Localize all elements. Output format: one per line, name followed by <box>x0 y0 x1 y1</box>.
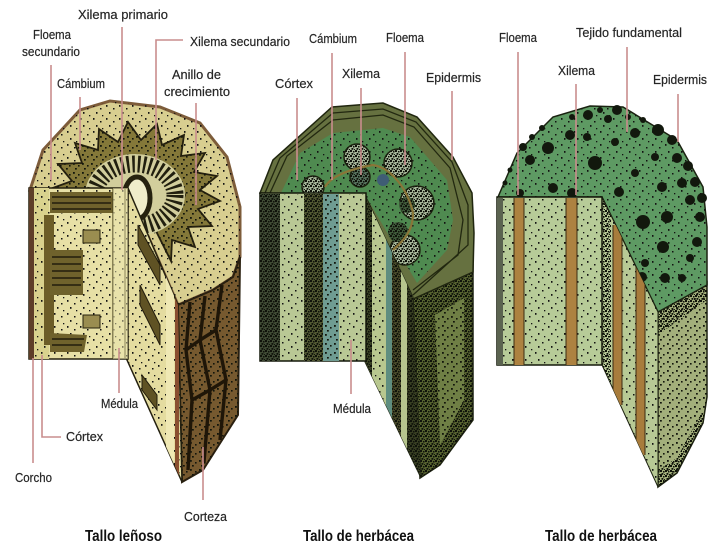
labels: dicot herbaceous stem: Cámbium <box>309 31 357 46</box>
labels: dicot herbaceous stem: Córtex <box>275 76 313 91</box>
labels: woody stem: Corcho <box>15 470 52 485</box>
labels: woody stem: Corteza <box>184 509 228 524</box>
diagram: woody stem <box>29 101 240 485</box>
labels: woody stem: crecimiento <box>164 84 230 99</box>
epidermis layers <box>265 109 468 295</box>
leader lines <box>33 27 678 500</box>
vascular bundles <box>302 144 434 265</box>
labels: monocot herbaceous stem <box>499 25 707 87</box>
cross-section disc <box>30 101 240 305</box>
cut front face <box>29 188 128 359</box>
labels: monocot herbaceous stem: Floema <box>499 30 538 45</box>
vascular bundle dots <box>502 105 707 283</box>
labels: monocot herbaceous stem: Xilema <box>558 63 596 78</box>
labels: woody stem: Córtex <box>66 429 103 444</box>
pith curl <box>124 177 150 219</box>
diagram: monocot herbaceous stem <box>497 105 707 490</box>
labels: woody stem: Xilema secundario <box>190 34 290 49</box>
outer side wall <box>658 282 707 487</box>
caption: monocot herbaceous stem: Tallo de herbácea <box>545 528 657 545</box>
cut front face <box>260 193 366 361</box>
primary xylem rays <box>85 154 185 236</box>
labels: woody stem: Cámbium <box>57 76 105 91</box>
ground tissue disc <box>498 106 707 312</box>
epidermis band <box>260 103 474 299</box>
labels: dicot herbaceous stem: Epidermis <box>426 70 481 85</box>
growth ring with spikes <box>50 122 220 261</box>
labels: woody stem: Médula <box>101 396 139 411</box>
labels: dicot herbaceous stem: Floema <box>386 30 425 45</box>
labels: woody stem <box>15 7 290 524</box>
cut side face <box>125 185 185 485</box>
caption: dicot herbaceous stem: Tallo de herbácea <box>303 528 414 545</box>
cortex <box>280 128 453 283</box>
cambium arc <box>325 165 413 250</box>
cut side face <box>602 195 658 490</box>
labels: woody stem: Floema <box>33 27 72 42</box>
labels: woody stem: secundario <box>22 44 80 59</box>
bark <box>178 257 240 482</box>
labels: dicot herbaceous stem <box>275 30 481 416</box>
outer side wall <box>413 265 473 478</box>
diagram: dicot herbaceous stem <box>260 103 474 480</box>
labels: dicot herbaceous stem: Médula <box>333 401 372 416</box>
labels: woody stem: Xilema primario <box>78 7 168 22</box>
disc stipple <box>30 101 240 305</box>
labels: dicot herbaceous stem: Xilema <box>342 66 381 81</box>
labels: monocot herbaceous stem: Epidermis <box>653 72 707 87</box>
cut side face <box>365 190 423 480</box>
labels: woody stem: Anillo de <box>172 67 221 82</box>
ring texture <box>50 122 220 261</box>
caption: woody stem: Tallo leñoso <box>85 528 162 545</box>
labels: monocot herbaceous stem: Tejido fundamental <box>576 25 682 40</box>
cut front face <box>497 197 602 365</box>
